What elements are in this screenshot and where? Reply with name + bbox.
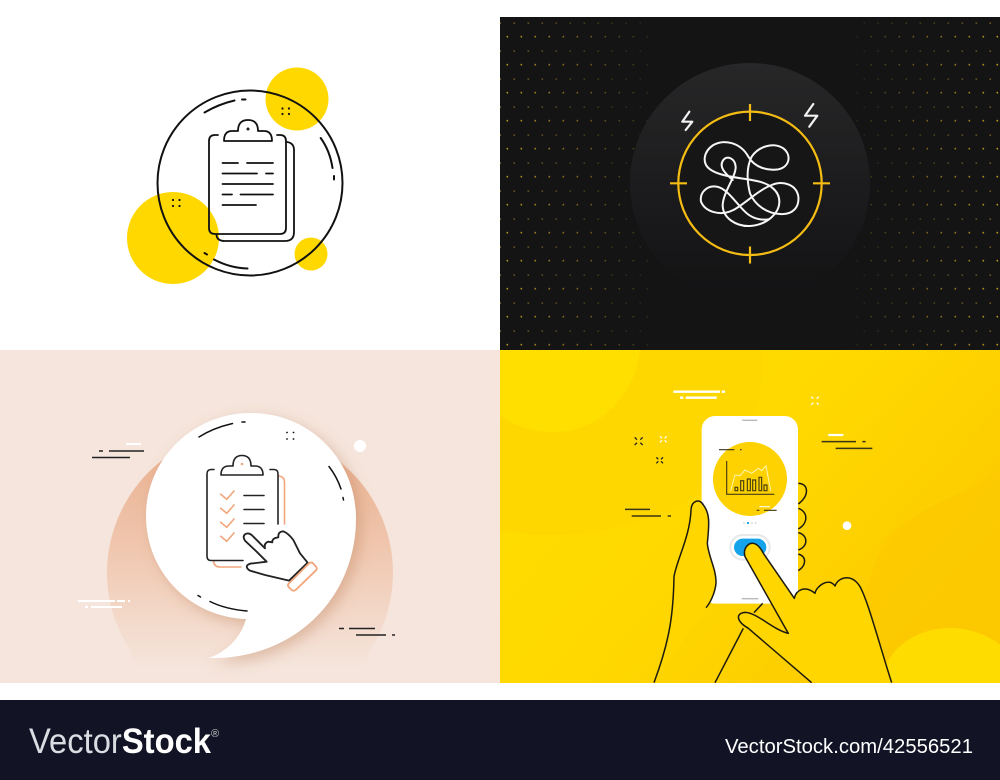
icon: tangle [701,142,798,226]
icon: target ring [670,104,830,264]
panel: checklist on beige [0,350,500,683]
icon: left hand [654,501,716,683]
icon: sparkle dots [286,432,294,440]
icon: area and bar chart [719,450,777,510]
panel: clipboard on white [0,0,500,350]
icon: bubble accent strokes [198,422,344,611]
panel: phone on yellow [500,350,1000,683]
icon: phone [702,416,798,604]
icon: white dot [843,521,851,530]
icon: peach circle [107,430,393,683]
footer bar [0,683,1000,780]
icon: pager dots [743,522,757,524]
icon: right hand [715,543,892,683]
icon: checklist clipboard [207,456,284,567]
icon: back fingers [798,483,806,571]
icon: pointing hand [244,531,317,591]
icon: dark disc [630,63,870,303]
icon: yellow circles [127,68,328,284]
decorative speed lines [625,392,872,516]
icon: clipboard [209,120,294,241]
footer logo text: VectorStock [29,722,211,761]
footer registered mark: ® [211,728,219,740]
icon: blue button [730,535,770,560]
icon: speech bubble [146,413,356,658]
icon: white dot [354,440,366,452]
icon: chart disc [713,442,787,516]
panel: tangled line on dark [500,17,1000,350]
decorative speed lines [78,444,395,635]
icon: sparkle dots [172,107,290,207]
icon: lightning bolts [682,104,817,130]
illustration: phone and hands [625,392,892,683]
icon: outer ring [158,90,342,276]
footer stock id: VectorStock.com/42556521 [725,736,973,758]
icon: sparkle dots [635,397,819,463]
background blobs [500,350,1000,683]
